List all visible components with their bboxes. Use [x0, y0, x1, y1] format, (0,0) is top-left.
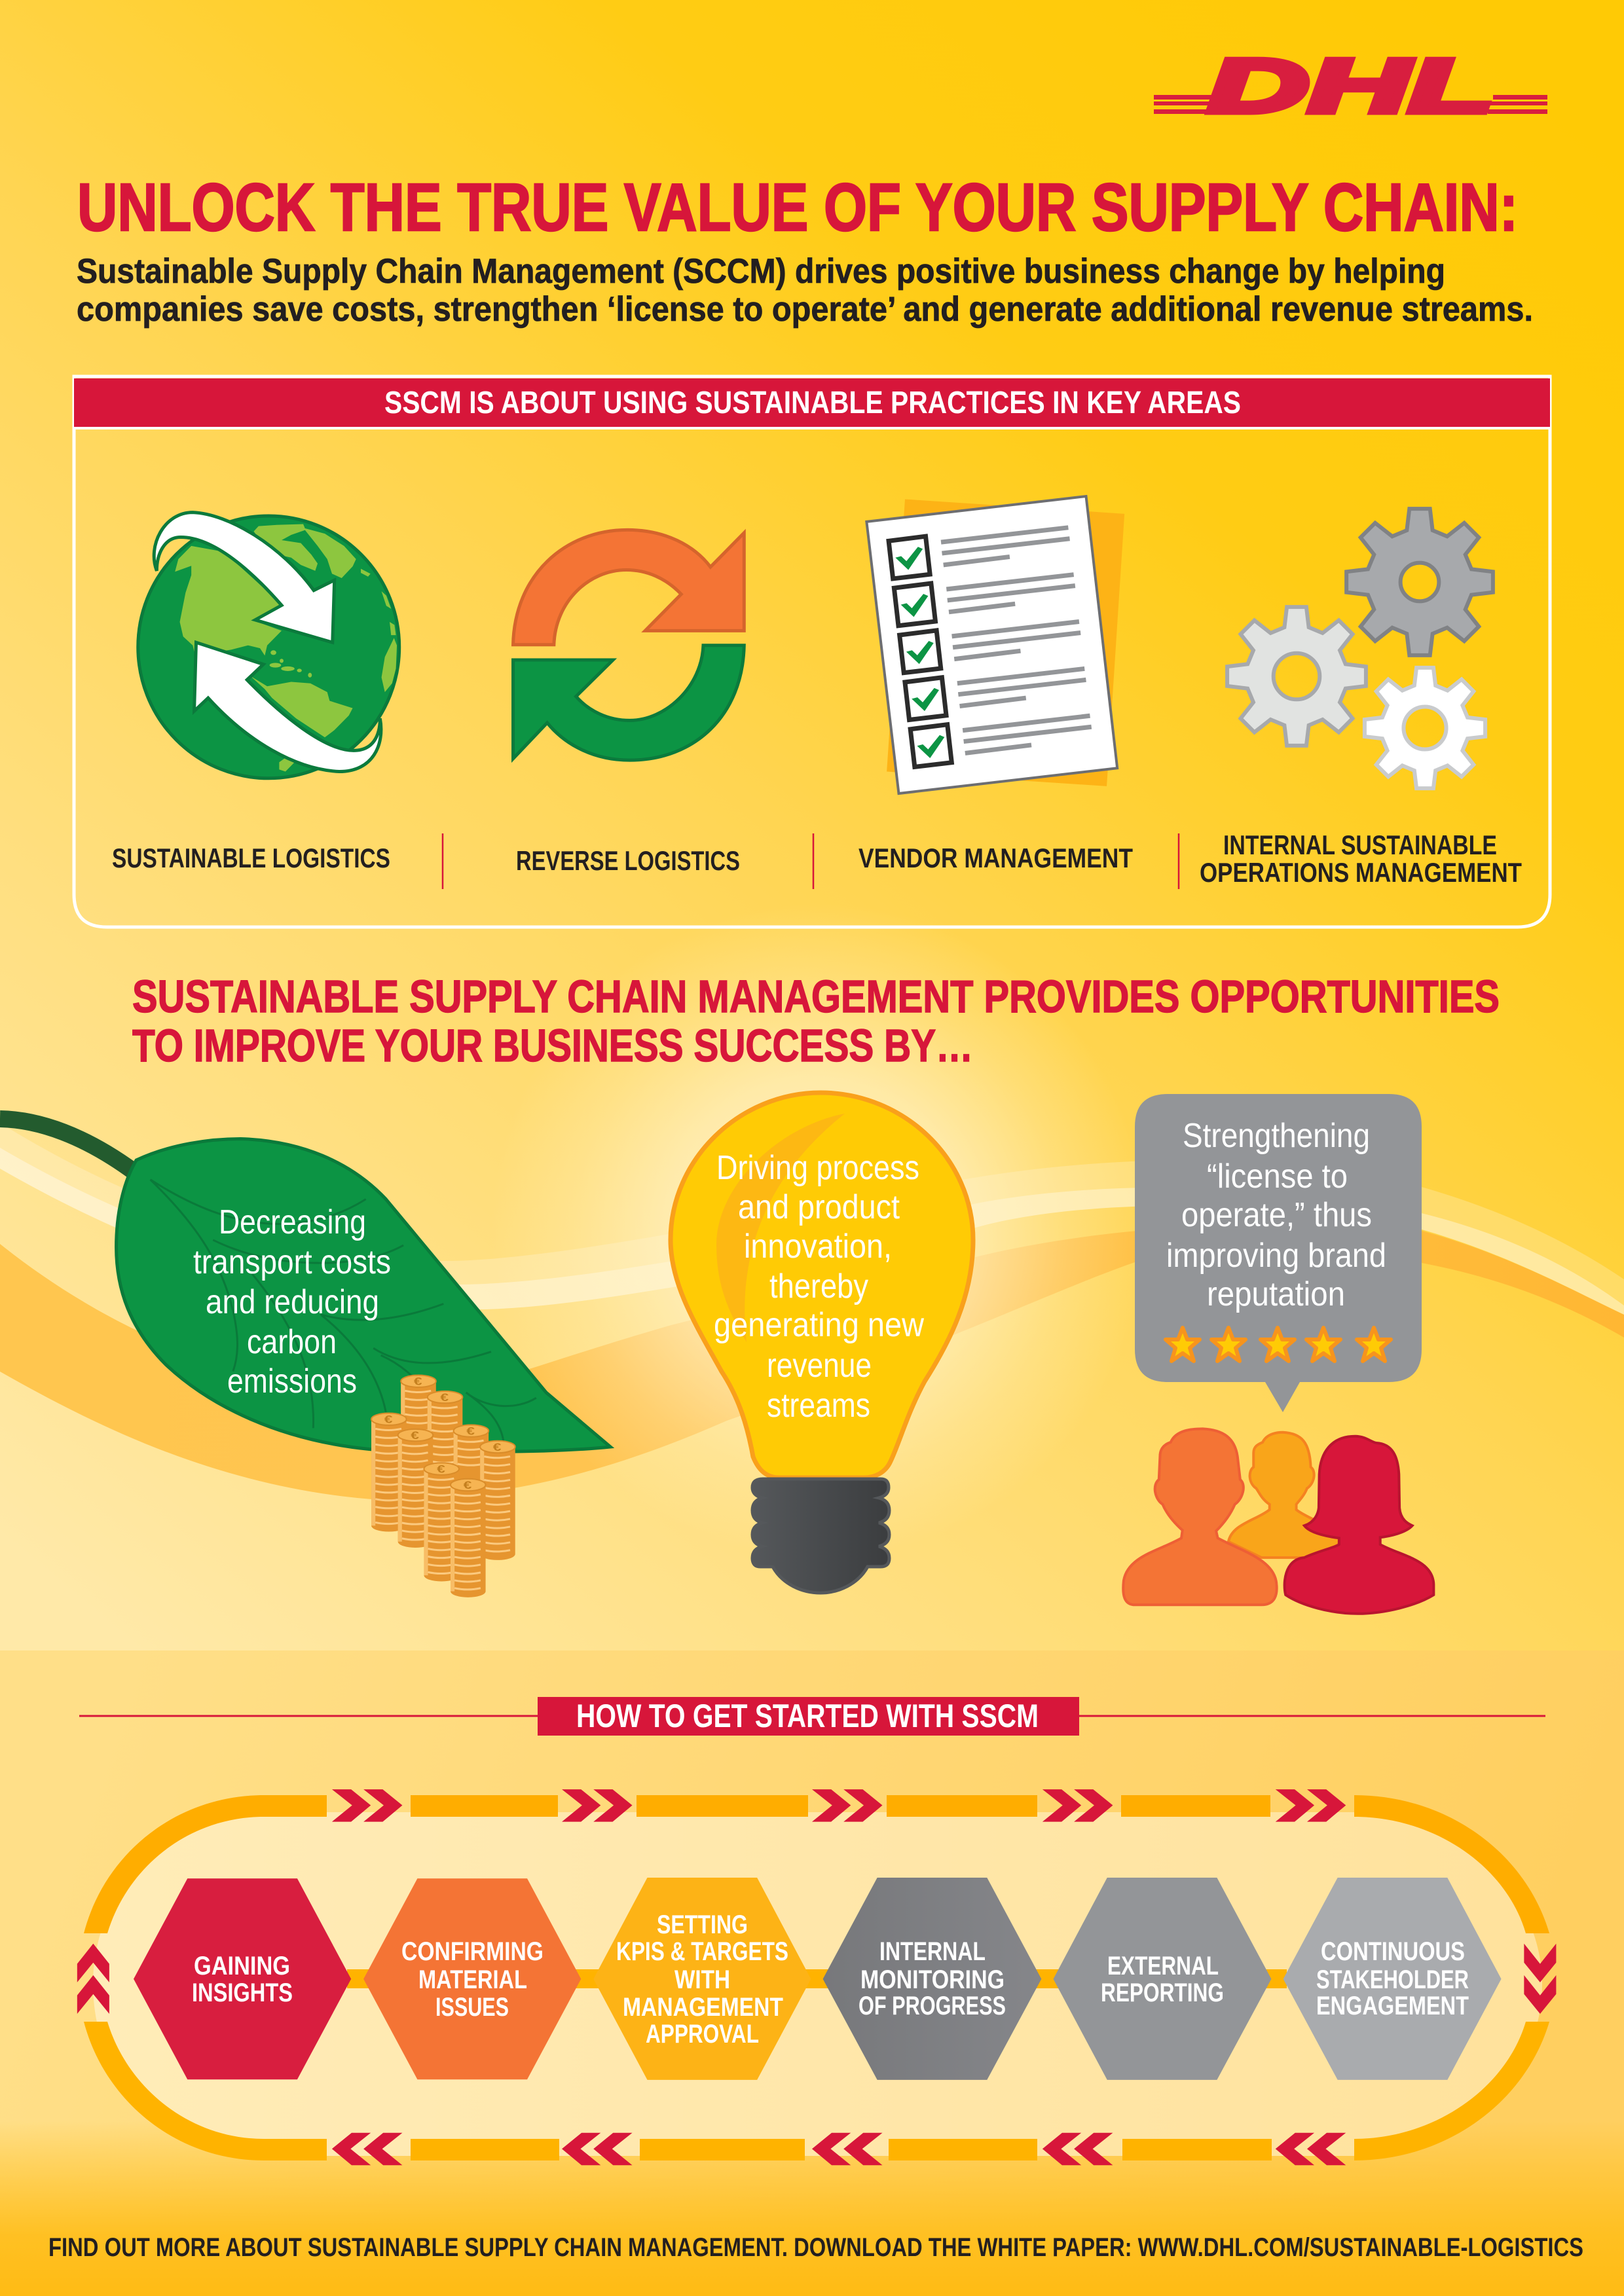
- label dividers: [443, 833, 1179, 889]
- background: upper area: [0, 0, 1624, 1653]
- subtitle text: companies save costs, strengthen ‘license to operate’ and generate additional revenue streams.: [77, 290, 1533, 329]
- bulb text: revenue: [767, 1347, 872, 1385]
- illustration: coin stacks: [371, 1375, 515, 1597]
- step 2: confirming material issues: MATERIAL: [418, 1965, 527, 1994]
- bulb text: thereby: [769, 1267, 868, 1305]
- subtitle text: [77, 252, 1533, 329]
- area labels: SUSTAINABLE LOGISTICS: [112, 843, 390, 873]
- illustration: coin stacks: €: [411, 1430, 419, 1442]
- section heading: opportunities: [132, 971, 1500, 1071]
- illustration: coin stacks: €: [414, 1376, 422, 1388]
- step 3: setting KPIs: SETTING: [657, 1910, 748, 1939]
- background: footer fade: [0, 2121, 1624, 2296]
- area labels: VENDOR MANAGEMENT: [858, 843, 1133, 873]
- illustration: speech bubble: [1135, 1094, 1422, 1412]
- five stars: [1166, 1328, 1391, 1361]
- background swooshes: [0, 1123, 1624, 1501]
- chevrons left: [77, 1944, 109, 2014]
- step 5: external reporting: REPORTING: [1101, 1978, 1224, 2007]
- leaf text: and reducing: [206, 1283, 379, 1321]
- illustration: coin stacks: €: [466, 1426, 475, 1438]
- bulb text: Driving process: [716, 1149, 919, 1187]
- icon: gears: [1227, 509, 1493, 788]
- step 3: setting KPIs: WITH: [674, 1965, 730, 1994]
- process track: [77, 1789, 1556, 2165]
- step 4: internal monitoring: MONITORING: [860, 1965, 1005, 1994]
- illustration: coin stacks: €: [493, 1442, 502, 1453]
- panel heading: SSCM IS ABOUT USING SUSTAINABLE PRACTICES IN KEY AREAS: [384, 386, 1241, 420]
- illustration: coin stacks: €: [464, 1480, 471, 1491]
- step 2: confirming material issues: CONFIRMING: [401, 1937, 544, 1966]
- panel outline: [74, 376, 1550, 927]
- step 5: external reporting: EXTERNAL: [1107, 1952, 1219, 1980]
- illustration: light bulb with text: [671, 1093, 973, 1593]
- background glow behind bulb: [491, 903, 1146, 1558]
- section heading: how to get started: HOW TO GET STARTED WITH SSCM: [576, 1698, 1039, 1734]
- section heading: how to get started: [79, 1697, 1545, 1736]
- step 3: setting KPIs: APPROVAL: [646, 2020, 759, 2049]
- bulb text: streams: [767, 1387, 870, 1425]
- bubble text: [1166, 1117, 1386, 1313]
- leaf stem: [0, 1119, 134, 1172]
- bubble text: reputation: [1207, 1275, 1345, 1313]
- leaf text: Decreasing: [219, 1203, 366, 1241]
- DHL logo: [1154, 43, 1547, 128]
- step 5: external reporting: [1054, 1878, 1271, 2080]
- illustration: coin stacks: €: [440, 1392, 449, 1404]
- illustration: leaf with text: [0, 1119, 610, 1451]
- banner underline: [74, 427, 1550, 429]
- bulb text: [714, 1149, 924, 1425]
- bubble text: “license to: [1207, 1157, 1348, 1195]
- track top segments: [84, 1795, 1549, 1933]
- icon: checklist: [866, 496, 1124, 793]
- bulb highlight: [716, 1114, 845, 1342]
- step 4: internal monitoring: [823, 1878, 1041, 2080]
- track inner pill: [93, 1812, 1542, 2156]
- background: lower area: [0, 1650, 1624, 2296]
- bulb text: generating new: [714, 1306, 924, 1344]
- step 1: gaining insights: [134, 1878, 351, 2079]
- step 3: setting KPIs: [593, 1878, 811, 2080]
- step 2: confirming material issues: [363, 1878, 581, 2079]
- step 3: setting KPIs: KPIS & TARGETS: [616, 1937, 788, 1966]
- bubble text: operate,” thus: [1181, 1196, 1372, 1234]
- chevrons bottom: [332, 2133, 1346, 2165]
- section heading: opportunities: TO IMPROVE YOUR BUSINESS SUCCESS BY…: [132, 1020, 973, 1071]
- chevrons right: [1524, 1944, 1556, 2014]
- step 1: gaining insights: INSIGHTS: [192, 1978, 293, 2007]
- illustration: coin stacks: €: [437, 1464, 445, 1476]
- subtitle text: Sustainable Supply Chain Management (SCCM) drives positive business change by helping: [77, 252, 1445, 291]
- leaf text: emissions: [227, 1362, 357, 1400]
- leaf text: carbon: [247, 1323, 337, 1361]
- bulb text: innovation,: [744, 1228, 892, 1266]
- track connector: [347, 1969, 1287, 1988]
- leaf shape and veins: [117, 1139, 610, 1451]
- track bottom segments: [84, 2022, 1549, 2160]
- step 2: confirming material issues: ISSUES: [435, 1993, 509, 2022]
- illustration: coin stacks: €: [384, 1414, 392, 1426]
- illustration: people silhouettes: [1123, 1429, 1433, 1614]
- area labels: REVERSE LOGISTICS: [516, 845, 740, 876]
- icon: reverse arrows: [513, 530, 744, 760]
- bubble shape: [1135, 1094, 1422, 1412]
- chevrons top: [332, 1789, 1346, 1822]
- bubble text: Strengthening: [1183, 1117, 1370, 1155]
- area labels: [112, 829, 1522, 888]
- step 6: continuous stakeholder engagement: CONTINUOUS: [1321, 1937, 1465, 1966]
- panel banner: [74, 378, 1550, 428]
- panel: key areas: [74, 376, 1550, 927]
- step 6: continuous stakeholder engagement: [1283, 1878, 1502, 2080]
- icon: globe with arrows: [138, 513, 399, 778]
- step 4: internal monitoring: INTERNAL: [879, 1937, 986, 1966]
- DHL logo: DHL: [1208, 43, 1494, 128]
- leaf text: transport costs: [193, 1243, 391, 1281]
- step 3: setting KPIs: MANAGEMENT: [623, 1993, 783, 2022]
- leaf text: [193, 1203, 391, 1400]
- bulb base: [752, 1479, 889, 1593]
- step 6: continuous stakeholder engagement: STAKEHOLDER: [1316, 1965, 1469, 1994]
- bubble text: improving brand: [1166, 1237, 1386, 1275]
- area labels: INTERNAL SUSTAINABLE: [1223, 829, 1497, 860]
- step 6: continuous stakeholder engagement: ENGAGEMENT: [1316, 1992, 1469, 2020]
- bulb text: and product: [738, 1188, 900, 1226]
- step 1: gaining insights: GAINING: [194, 1952, 290, 1980]
- area labels: OPERATIONS MANAGEMENT: [1200, 857, 1522, 888]
- bulb glass: [671, 1093, 973, 1478]
- step 4: internal monitoring: OF PROGRESS: [858, 1992, 1006, 2020]
